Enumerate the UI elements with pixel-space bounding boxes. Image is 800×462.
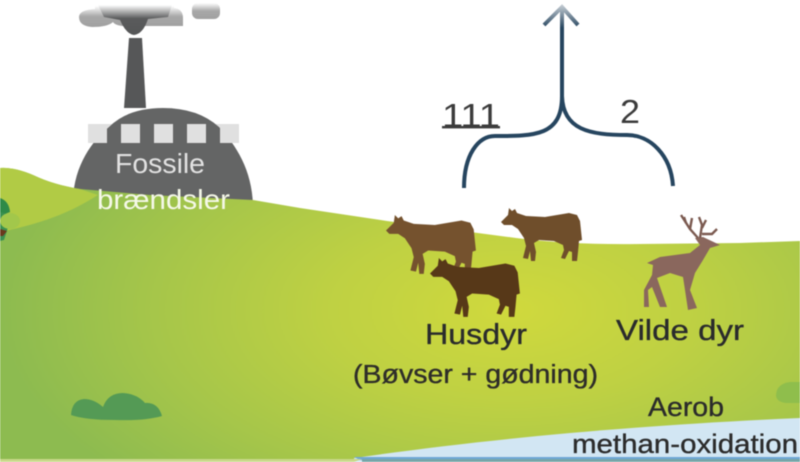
deer bbox=[644, 215, 720, 310]
fossil fuels label bbox=[97, 148, 230, 215]
lighter left hill bbox=[0, 168, 98, 232]
cow back right bbox=[501, 208, 582, 261]
bush right edge bbox=[776, 382, 800, 403]
belching and manure label: (Bøvser + gødning) bbox=[353, 361, 598, 389]
aerobic oxidation label: Aerob bbox=[648, 392, 724, 422]
wild animals label: Vilde dyr bbox=[616, 315, 744, 347]
fossil fuels label: brændsler bbox=[97, 184, 230, 215]
green hill landscape bbox=[0, 168, 800, 462]
tree at left edge bbox=[0, 198, 20, 241]
chimney with smoke plume bbox=[98, 5, 172, 108]
aerobic oxidation label bbox=[572, 392, 798, 459]
bush left bbox=[71, 393, 162, 420]
aerobic oxidation label: methan-oxidation bbox=[572, 429, 798, 459]
smoke clouds bbox=[79, 3, 220, 27]
cow back left bbox=[386, 215, 476, 274]
power plant building bbox=[73, 108, 253, 205]
value: livestock 111: 111 bbox=[442, 97, 500, 134]
water body bbox=[0, 418, 800, 462]
value: wild animals 2: 2 bbox=[620, 93, 640, 130]
merging emission arrow bbox=[464, 7, 673, 188]
fossil fuels label: Fossile bbox=[115, 148, 205, 179]
cow front bbox=[430, 258, 520, 317]
livestock label: Husdyr bbox=[425, 319, 527, 351]
